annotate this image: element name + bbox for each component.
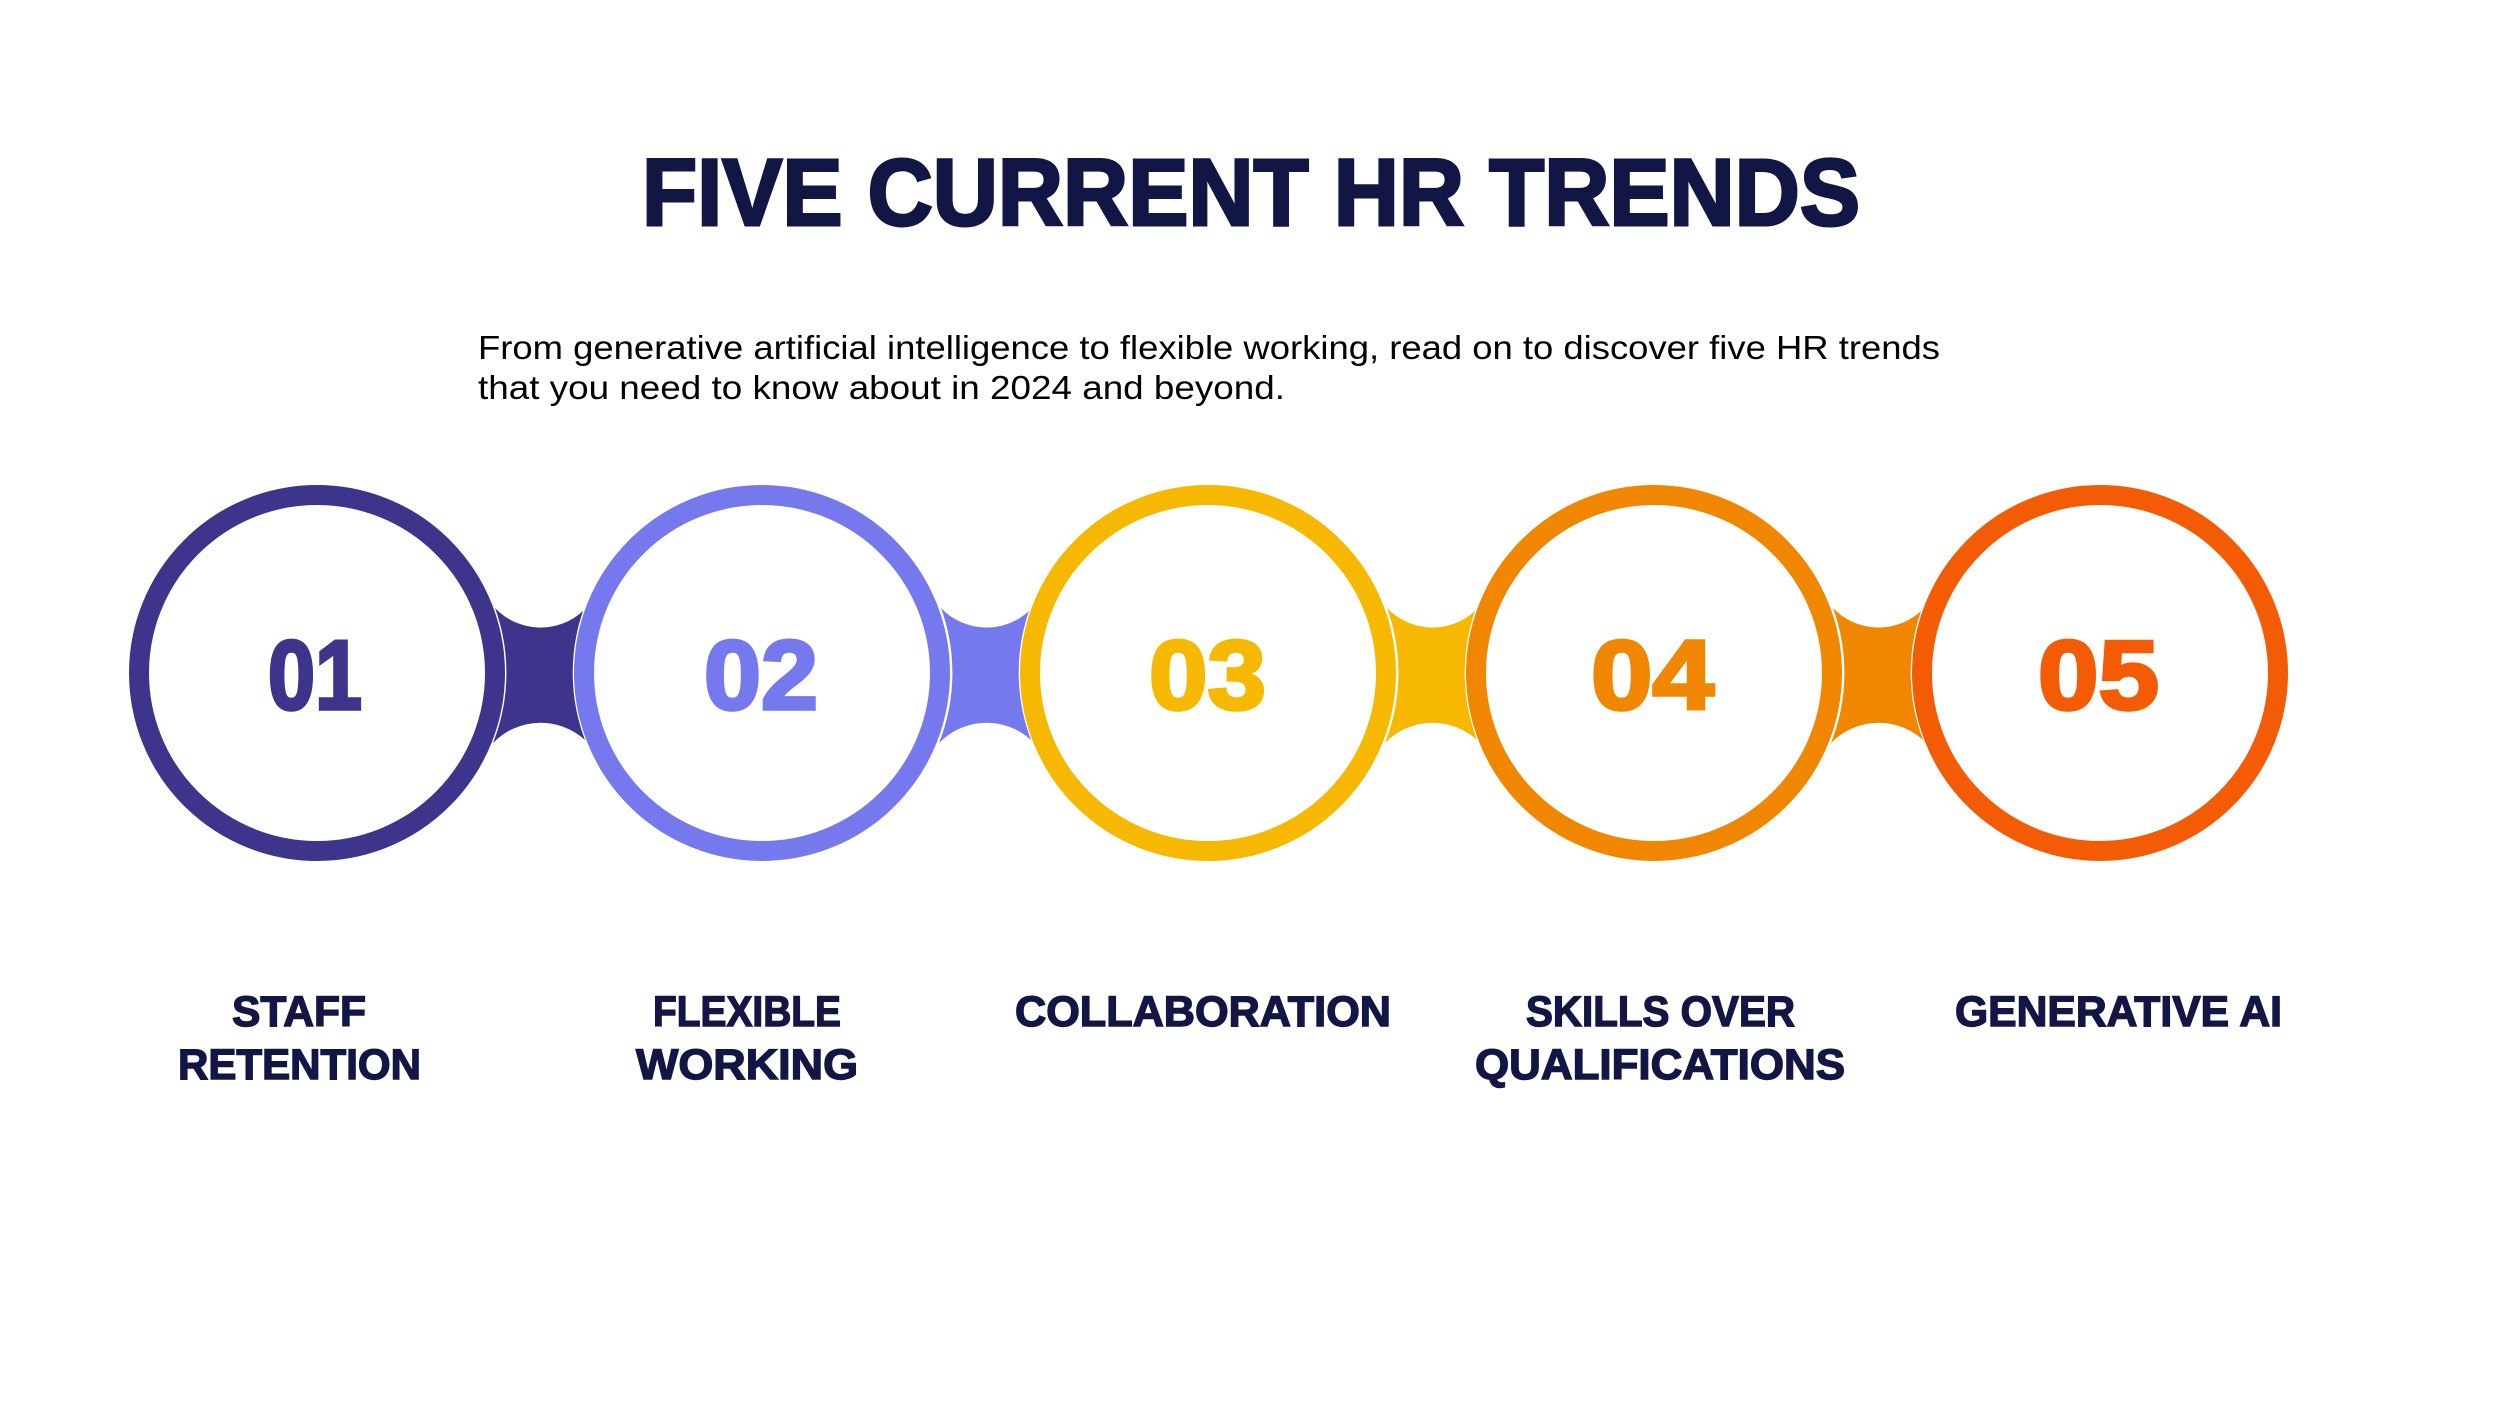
step 04 circle: 04 <box>1591 620 1714 730</box>
step 05 circle: 05 <box>2038 620 2159 730</box>
connector 2 to 3 <box>939 608 1031 743</box>
label: skills over qualifications <box>1475 988 1845 1089</box>
label: flexible working: FLEXIBLE <box>653 988 841 1036</box>
label: staff retention <box>178 988 421 1089</box>
label: staff retention: STAFF <box>232 988 366 1036</box>
intro text block: that you need to know about in 2024 and beyond. <box>478 369 1285 406</box>
connector 4 to 5 <box>1831 608 1923 743</box>
step 02 circle: 02 <box>704 620 818 730</box>
step 03 circle <box>1030 495 1386 851</box>
connector 3 to 4 <box>1385 608 1477 743</box>
label: staff retention: RETENTION <box>178 1041 421 1089</box>
label: generative ai: GENERATIVE AI <box>1955 988 2282 1036</box>
step 03 circle: 03 <box>1149 620 1266 730</box>
step 01 circle: 01 <box>268 620 362 730</box>
intro text block: From generative artificial intelligence to flexible working, read on to discover five HR trends <box>478 329 1940 366</box>
connector 1 to 2 <box>493 608 585 743</box>
step 04 circle <box>1476 495 1832 851</box>
label: flexible working <box>636 988 858 1089</box>
step 05 circle <box>1922 495 2278 851</box>
label: collaboration: COLLABORATION <box>1015 988 1391 1036</box>
title: FIVE CURRENT HR TRENDS <box>642 140 1860 246</box>
intro text block <box>478 329 1940 406</box>
label: flexible working: WORKING <box>636 1041 858 1089</box>
step 01 circle <box>139 495 495 851</box>
label: skills over qualifications: SKILLS OVER <box>1526 988 1795 1036</box>
step 02 circle <box>584 495 940 851</box>
label: skills over qualifications: QUALIFICATIONS <box>1475 1041 1845 1089</box>
